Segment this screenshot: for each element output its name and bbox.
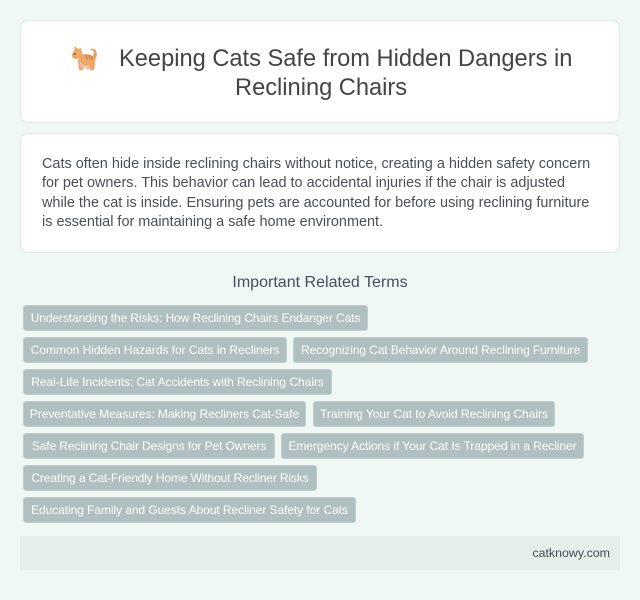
tag: Educating Family and Guests About Recliner Safety for Cats bbox=[31, 503, 348, 517]
title line 1: Keeping Cats Safe from Hidden Dangers in bbox=[119, 46, 572, 72]
description line 4: is essential for maintaining a safe home environment. bbox=[42, 214, 383, 230]
icon: cat bbox=[72, 46, 97, 70]
tag: Safe Reclining Chair Designs for Pet Owners bbox=[32, 439, 266, 453]
tag bbox=[23, 433, 275, 459]
description line 2: for pet owners. This behavior can lead to accidental injuries if the chair is adjusted bbox=[42, 175, 565, 191]
tag: Real-Life Incidents: Cat Accidents with Reclining Chairs bbox=[31, 375, 324, 389]
tag: Preventative Measures: Making Recliners Cat-Safe bbox=[30, 407, 299, 421]
tag bbox=[281, 433, 584, 459]
tag bbox=[313, 401, 555, 427]
panel: description card bbox=[20, 133, 620, 253]
tag: Emergency Actions if Your Cat Is Trapped in a Recliner bbox=[288, 439, 577, 453]
footer source text: catknowy.com bbox=[532, 546, 610, 560]
heading: related terms: Important Related Terms bbox=[232, 273, 408, 291]
tag bbox=[23, 337, 287, 363]
panel: title card bbox=[20, 20, 620, 123]
tag list bbox=[23, 305, 588, 523]
tag bbox=[23, 465, 317, 491]
tag: Common Hidden Hazards for Cats in Recliners bbox=[31, 343, 279, 357]
tag bbox=[23, 369, 332, 395]
tag: Recognizing Cat Behavior Around Reclining Furniture bbox=[301, 343, 580, 357]
tag bbox=[23, 497, 356, 523]
tag bbox=[23, 401, 306, 427]
tag: Creating a Cat-Friendly Home Without Recliner Risks bbox=[31, 471, 309, 485]
tag bbox=[23, 305, 368, 331]
tag: Training Your Cat to Avoid Reclining Chairs bbox=[320, 407, 548, 421]
title line 2: Reclining Chairs bbox=[235, 75, 407, 101]
tag: Understanding the Risks: How Reclining Chairs Endanger Cats bbox=[31, 311, 360, 325]
description line 1: Cats often hide inside reclining chairs without notice, creating a hidden safety concern bbox=[42, 156, 590, 172]
description line 3: while the cat is inside. Ensuring pets are accounted for before using reclining furniture bbox=[42, 195, 589, 211]
tag bbox=[293, 337, 588, 363]
footer bar bbox=[20, 536, 620, 570]
